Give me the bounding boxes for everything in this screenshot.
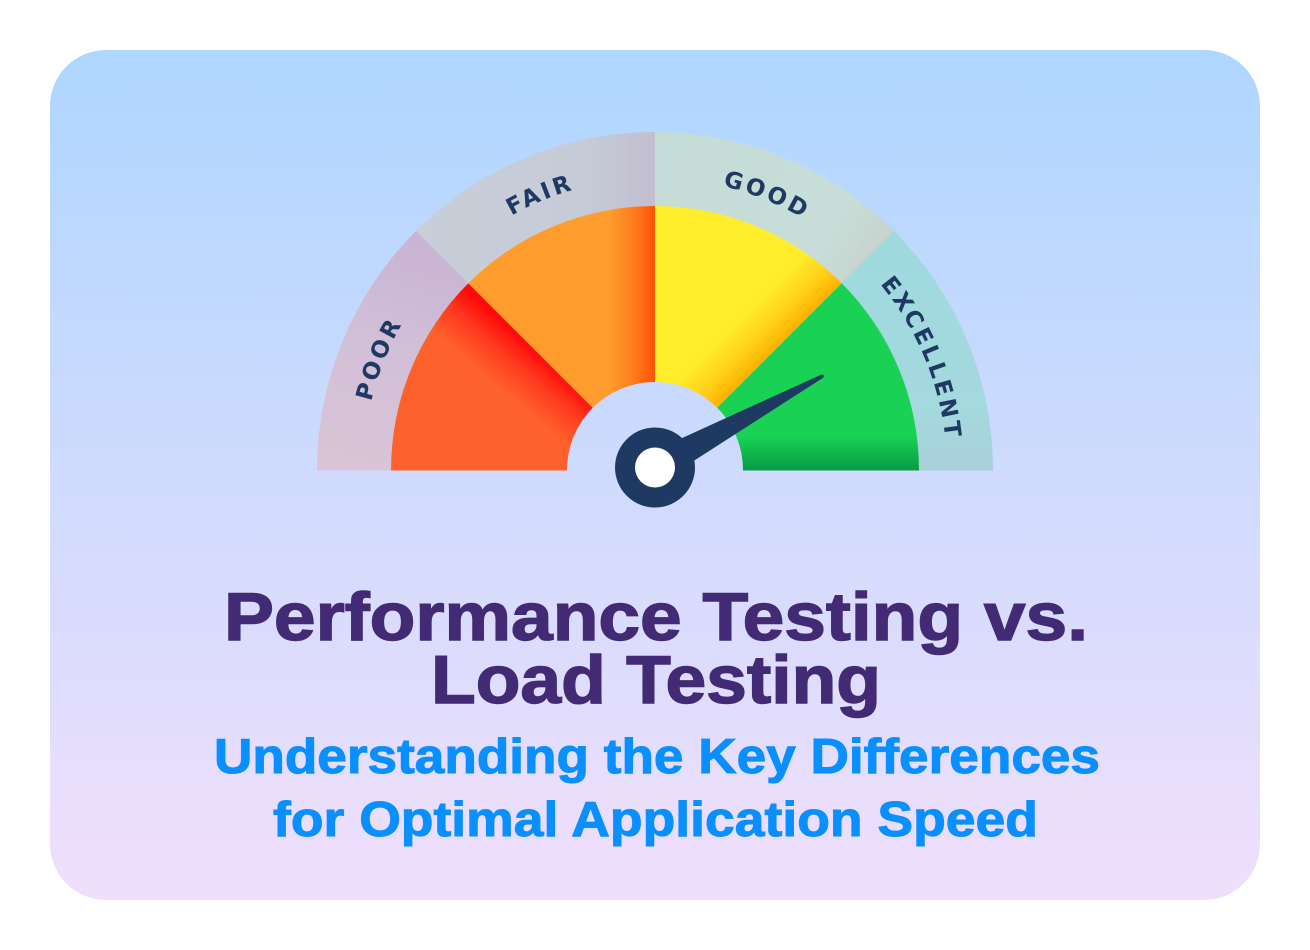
label: poor: POOR — [355, 320, 402, 400]
label: fair: FAIR — [506, 176, 572, 215]
subtitle: Understanding the Key Differences — [214, 730, 1100, 784]
speedometer gauge — [317, 132, 993, 508]
outer band: excellent — [842, 231, 993, 470]
segment: orange — [468, 206, 655, 408]
label: excellent: EXCELLENT — [882, 275, 962, 436]
title — [224, 579, 1088, 718]
subtitle — [214, 730, 1100, 847]
title: Performance Testing vs. — [224, 579, 1088, 655]
title: Load Testing — [431, 642, 881, 718]
needle — [615, 374, 824, 508]
outer band: poor — [317, 231, 468, 470]
label: good: GOOD — [726, 172, 806, 214]
subtitle: for Optimal Application Speed — [273, 793, 1038, 847]
segment: red — [391, 283, 593, 470]
outer band: good — [655, 132, 894, 283]
segment: green — [717, 283, 919, 470]
segment: yellow — [655, 206, 842, 408]
outer band: fair — [416, 132, 655, 283]
